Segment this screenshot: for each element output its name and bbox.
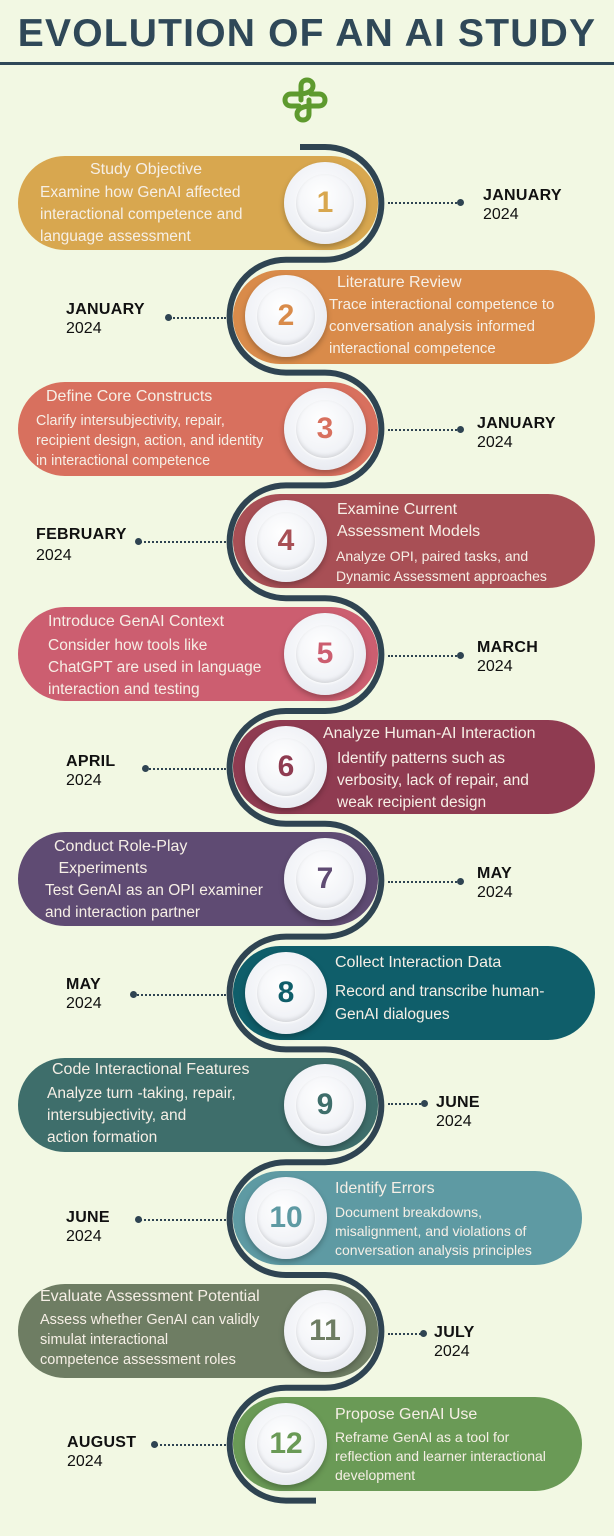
panel: step 1: interactional competence and — [40, 206, 242, 223]
text: FEBRUARY — [36, 526, 127, 543]
panel: step 1: Study Objective — [90, 161, 202, 178]
panel: step 5 — [18, 607, 378, 701]
panel: step 8 — [233, 946, 595, 1040]
text: 2024 — [66, 320, 102, 337]
panel: step 12: reflection and learner interactional — [335, 1448, 546, 1464]
panel: step 1 — [18, 156, 378, 250]
panel: step 4 — [233, 494, 595, 588]
panel: step 9 — [18, 1058, 378, 1152]
text: JANUARY — [477, 415, 556, 432]
panel: step 3: recipient design, action, and identity — [36, 433, 263, 449]
icon: green knot — [282, 78, 328, 122]
panel: step 2 — [233, 270, 595, 364]
text: 2024 — [66, 772, 102, 789]
text: APRIL — [66, 753, 116, 770]
panel: step 11: Evaluate Assessment Potential — [40, 1288, 260, 1305]
text: JUNE — [66, 1209, 110, 1226]
text: MAY — [477, 865, 512, 882]
panel: step 7 — [18, 832, 378, 926]
text: 8 — [278, 976, 294, 1009]
panel: step 6 — [233, 720, 595, 814]
panel: step 12: Propose GenAI Use — [335, 1406, 477, 1423]
number circles — [284, 162, 366, 244]
panel: step 7: Test GenAI as an OPI examiner — [45, 882, 263, 899]
panel: step 11: simulat interactional — [40, 1332, 168, 1348]
text: 2024 — [483, 206, 519, 223]
title: EVOLUTION OF AN AI STUDY — [18, 12, 596, 55]
panel: step 7: Conduct Role-Play — [54, 838, 187, 855]
panel: step 11 — [18, 1284, 378, 1378]
panel: step 5: Consider how tools like — [48, 637, 207, 654]
panel: step 8: Record and transcribe human- — [335, 983, 544, 1000]
panel: step 11: competence assessment roles — [40, 1352, 236, 1368]
panel: step 8: GenAI dialogues — [335, 1006, 450, 1023]
panel: step 3: in interactional competence — [36, 453, 210, 469]
panel: step 12 — [233, 1397, 582, 1491]
panel: step 3: Clarify intersubjectivity, repair, — [36, 413, 225, 429]
panel: step 10: Identify Errors — [335, 1180, 435, 1197]
text: 12 — [269, 1427, 303, 1460]
dates — [388, 202, 460, 204]
panel: step 4: Examine Current — [337, 501, 457, 518]
panel: step 6: verbosity, lack of repair, and — [337, 772, 529, 789]
text: 7 — [317, 862, 333, 895]
text: JULY — [434, 1324, 475, 1341]
panel: step 10: Document breakdowns, — [335, 1204, 482, 1220]
panel: step 5: Introduce GenAI Context — [48, 613, 224, 630]
text: JUNE — [436, 1094, 480, 1111]
text: MARCH — [477, 639, 538, 656]
panel: step 2: Trace interactional competence to — [329, 296, 554, 313]
panel: step 2: conversation analysis informed — [329, 318, 535, 335]
panel: step 3: Define Core Constructs — [46, 388, 212, 405]
panel: step 6: weak recipient design — [337, 794, 486, 811]
number circles: 1 — [317, 186, 333, 219]
text: 3 — [317, 412, 333, 445]
panel: step 10: misalignment, and violations of — [335, 1223, 526, 1239]
panel: step 10 — [233, 1171, 582, 1265]
text: 5 — [317, 637, 333, 670]
panel: step 2: interactional competence — [329, 340, 496, 357]
text: AUGUST — [67, 1434, 136, 1451]
text: 10 — [269, 1201, 303, 1234]
panel: step 4: Assessment Models — [337, 523, 480, 540]
text: 11 — [309, 1314, 341, 1347]
panel: step 9: intersubjectivity, and — [47, 1107, 186, 1124]
panel: step 1: Examine how GenAI affected — [40, 184, 240, 201]
text: 2024 — [477, 658, 513, 675]
text: 2024 — [436, 1113, 472, 1130]
panel: step 12: Reframe GenAI as a tool for — [335, 1429, 509, 1445]
text: 4 — [278, 524, 294, 557]
text: 2024 — [434, 1343, 470, 1360]
panel: step 6: Identify patterns such as — [337, 750, 505, 767]
panel: step 3 — [18, 382, 378, 476]
panel: step 6: Analyze Human-AI Interaction — [323, 725, 536, 742]
panel: step 4: Dynamic Assessment approaches — [336, 568, 547, 584]
panel: step 5: ChatGPT are used in language — [48, 659, 261, 676]
panel: step 7: Experiments — [58, 860, 147, 877]
text: 2024 — [477, 434, 513, 451]
panel: step 9: Code Interactional Features — [52, 1061, 249, 1078]
panel: step 9: Analyze turn -taking, repair, — [47, 1085, 236, 1102]
panel: step 10: conversation analysis principles — [335, 1242, 532, 1258]
panel: step 7: and interaction partner — [45, 904, 200, 921]
text: 9 — [317, 1088, 333, 1121]
text: JANUARY — [483, 187, 562, 204]
text: 6 — [278, 750, 294, 783]
panel: step 2: Literature Review — [337, 274, 462, 291]
text: 2024 — [66, 1228, 102, 1245]
panel: step 12: development — [335, 1467, 415, 1483]
text: 2024 — [66, 995, 102, 1012]
text: 2024 — [477, 884, 513, 901]
panel: step 4: Analyze OPI, paired tasks, and — [336, 548, 528, 564]
panel: step 9: action formation — [47, 1129, 157, 1146]
text: 2 — [278, 299, 294, 332]
panel: step 5: interaction and testing — [48, 681, 200, 698]
text: JANUARY — [66, 301, 145, 318]
text: 2024 — [67, 1453, 103, 1470]
panel: step 1: language assessment — [40, 228, 191, 245]
text: MAY — [66, 976, 101, 993]
text: 2024 — [36, 547, 72, 564]
panel: step 8: Collect Interaction Data — [335, 954, 501, 971]
panel: step 11: Assess whether GenAI can validly — [40, 1312, 259, 1328]
